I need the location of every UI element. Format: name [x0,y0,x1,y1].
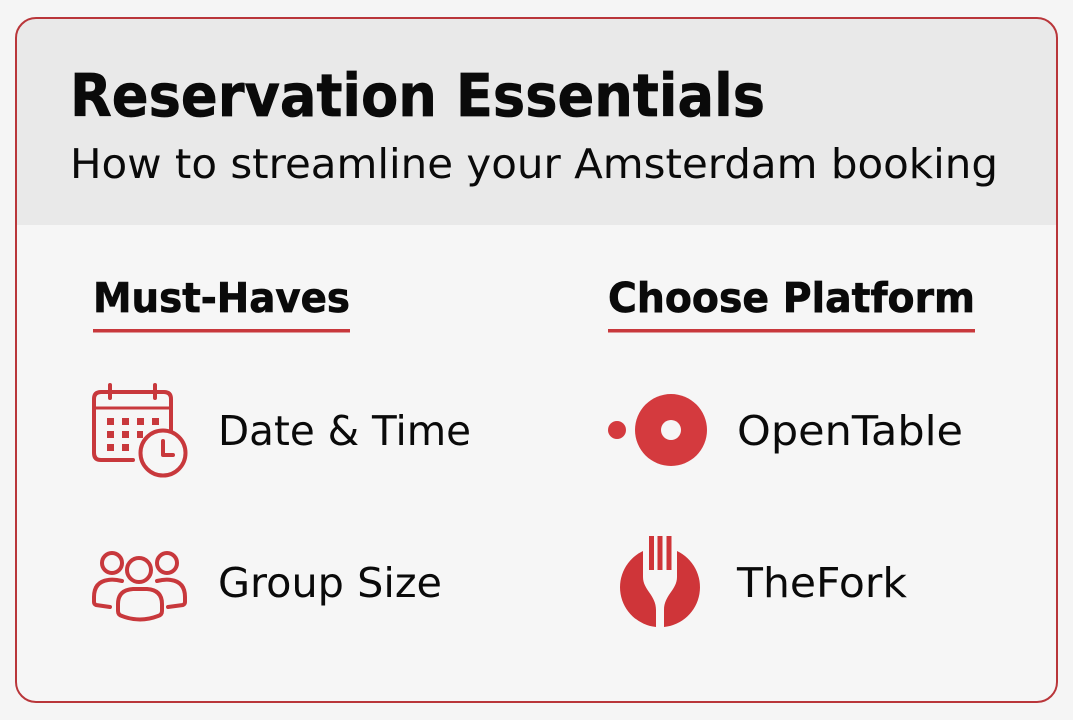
label: group size: Group Size [218,559,442,607]
title: Reservation Essentials [70,61,765,130]
panel: choose platform [608,274,975,627]
heading: choose platform: Choose Platform [608,274,975,322]
icon: TheFork logo [620,536,700,627]
icon: group of people [94,553,185,620]
heading underline [608,329,975,332]
panel: must-haves [93,274,471,620]
heading underline [93,329,350,332]
label: date and time: Date & Time [218,407,471,455]
panel: header band [16,18,1057,225]
icon: calendar with clock [94,385,186,476]
subtitle: How to streamline your Amsterdam booking [70,140,998,188]
icon: OpenTable logo [608,394,707,466]
label: OpenTable: OpenTable [737,407,963,455]
heading: must-haves: Must-Haves [93,274,350,322]
label: TheFork: TheFork [736,559,907,607]
